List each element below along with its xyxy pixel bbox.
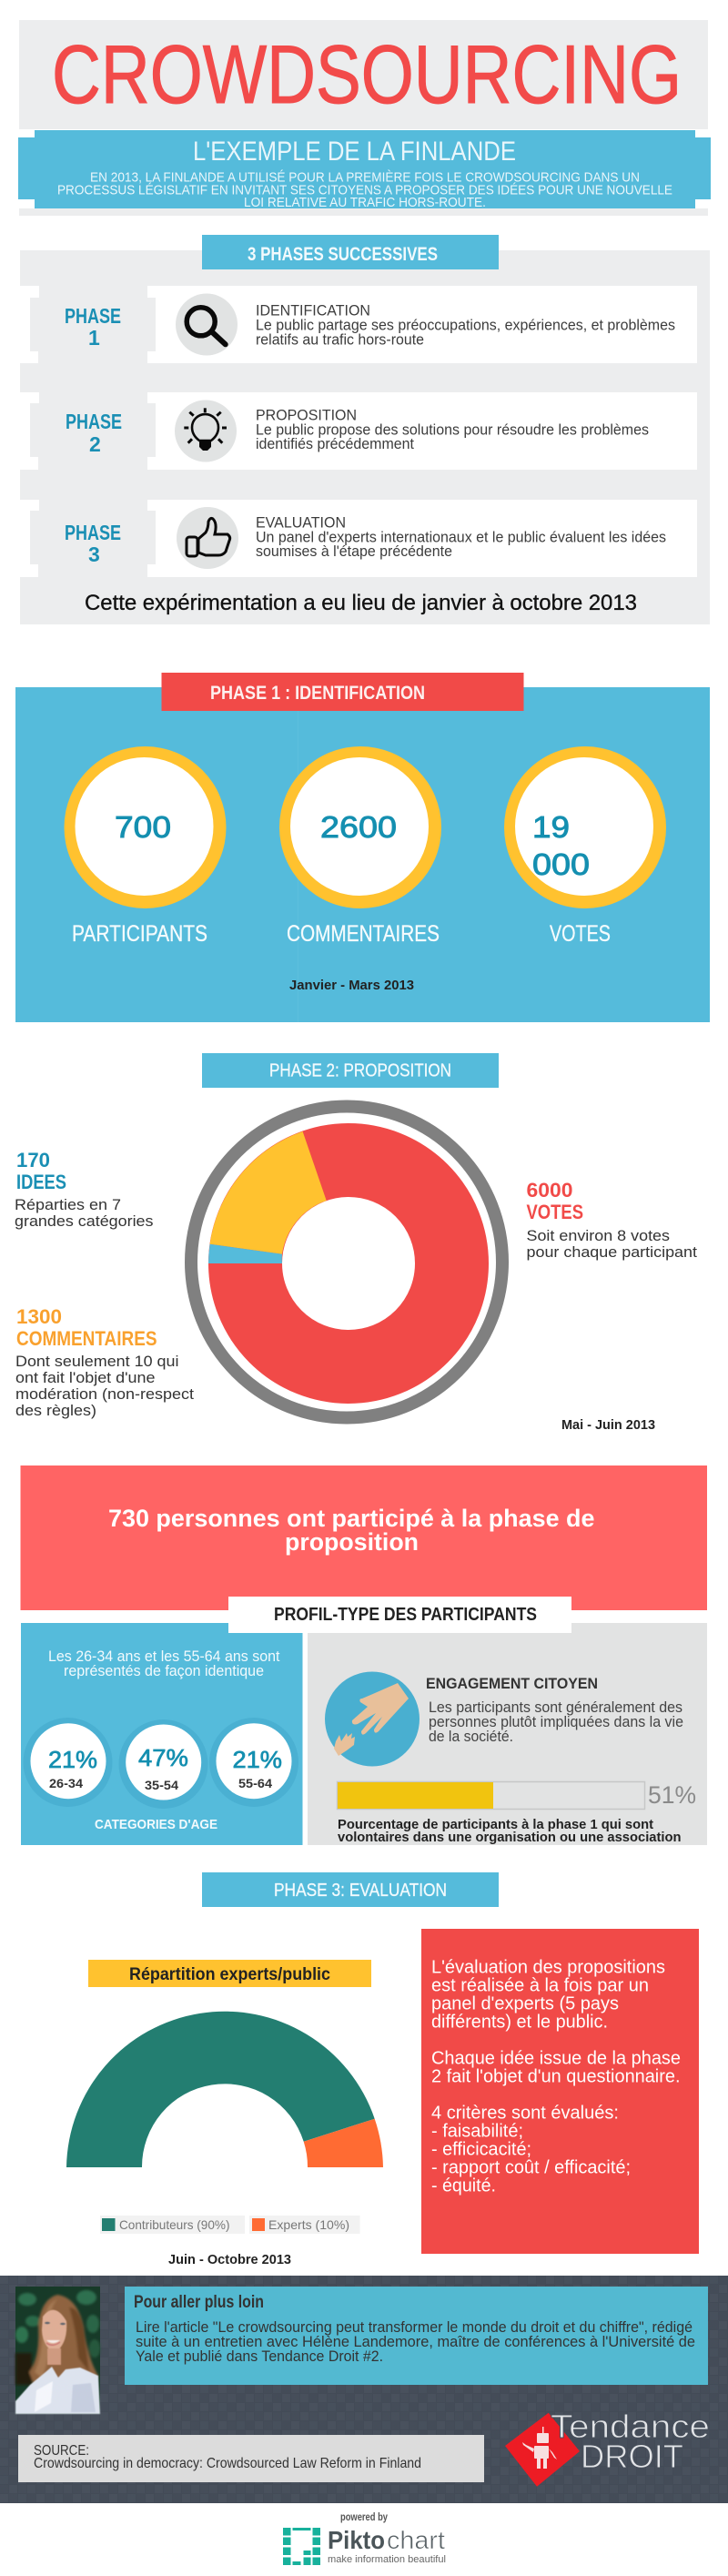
age intro text: Les 26-34 ans et les 55-64 ans sont	[48, 1648, 280, 1665]
phase 1 text: IDENTIFICATION	[256, 302, 370, 319]
callout: 170 idees: Réparties en 7	[15, 1196, 121, 1213]
phase 1 label: PHASE	[65, 304, 121, 328]
phase 2 text: identifiés précédemment	[256, 435, 414, 452]
icon: magnifier	[176, 293, 238, 355]
stat: 21% 55-64: 21%	[233, 1746, 282, 1773]
engagement text: personnes plutôt impliquées dans la vie	[429, 1713, 683, 1730]
heading tab: phase 2: PHASE 2: PROPOSITION	[269, 1061, 451, 1081]
icon: Piktochart logo mark	[283, 2528, 320, 2565]
age caption: CATEGORIES D'AGE	[95, 1817, 217, 1832]
engagement text: de la société.	[429, 1728, 513, 1745]
stat: 2600 commentaires: COMMENTAIRES	[287, 921, 440, 947]
stat: 700 participants: 700	[115, 810, 171, 844]
powered by Piktochart: chart	[387, 2526, 445, 2554]
stat: 700 participants: PARTICIPANTS	[72, 921, 207, 947]
stat: 21% 26-34: 26-34	[49, 1776, 83, 1790]
phase 2 label: 2	[89, 432, 101, 456]
engagement heading: ENGAGEMENT CITOYEN	[426, 1675, 598, 1692]
panel: 730 personnes	[20, 1465, 707, 1610]
callout: 170 idees	[15, 1149, 153, 1230]
panel: evaluation text: - efficicacité;	[431, 2139, 531, 2159]
chart label: Répartition experts/public	[129, 1965, 330, 1984]
ribbon description: EN 2013, LA FINLANDE A UTILISÉ POUR LA PREMIÈRE FOIS LE CROWDSOURCING DANS UN	[90, 169, 640, 186]
powered by Piktochart: make information beautiful	[328, 2554, 446, 2565]
callout: 170 idees: 170	[16, 1149, 50, 1171]
heading tab: phase 3	[202, 1872, 499, 1907]
phase 3 text: EVALUATION	[256, 513, 346, 532]
powered by Piktochart	[283, 2512, 446, 2565]
panel: categories d'age	[21, 1623, 302, 1845]
header panel	[18, 20, 711, 216]
stat: 19 000 votes: 19	[532, 810, 570, 844]
phase 1 label: 1	[88, 326, 100, 350]
stat: 21% 55-64	[209, 1718, 298, 1807]
phase 3 label: 3	[88, 543, 100, 566]
callout: 6000 votes: VOTES	[526, 1201, 583, 1223]
heading tab: profil-type: PROFIL-TYPE DES PARTICIPANTS	[274, 1605, 537, 1625]
phase 2 row	[20, 392, 697, 470]
phase 2 text: Le public propose des solutions pour résoudre les problèmes	[256, 421, 649, 439]
phase 3 row	[20, 500, 697, 577]
callout: 6000 votes	[526, 1179, 697, 1261]
ribbon: l'exemple de la Finlande	[18, 129, 711, 210]
stat: 19 000 votes: VOTES	[550, 921, 611, 947]
heading tab: phase 1	[162, 673, 524, 711]
progress bar 51%	[337, 1781, 696, 1810]
panel: pour aller plus loin: Lire l'article "Le crowdsourcing peut transformer le monde du droit et du chiffre", rédigé	[136, 2318, 693, 2336]
phase 3 text	[256, 513, 666, 560]
chart legend	[100, 2216, 360, 2234]
stat: 2600 commentaires: 2600	[320, 810, 397, 844]
footer band	[0, 2276, 728, 2503]
panel: evaluation text: 4 critères sont évalués:	[431, 2103, 619, 2123]
phase 1 text: relatifs au trafic hors-route	[256, 331, 424, 348]
panel: pour aller plus loin: Pour aller plus loin	[134, 2293, 264, 2312]
phase 1 row	[20, 286, 697, 363]
stat: 47% 35-54: 47%	[138, 1744, 188, 1771]
date: juin octobre: Juin - Octobre 2013	[168, 2253, 291, 2267]
callout: 1300 commentaires: des règles)	[15, 1402, 96, 1419]
powered by Piktochart: powered by	[340, 2512, 388, 2523]
progress caption: Pourcentage de participants à la phase 1 qui sont	[338, 1817, 653, 1832]
section: phase 3 evaluation	[66, 1872, 699, 2267]
date: janvier mars: Janvier - Mars 2013	[289, 979, 414, 993]
phase 3 text: Un panel d'experts internationaux et le public évaluent les idées	[256, 528, 666, 546]
stat: 19 000 votes: 000	[532, 847, 590, 881]
callout: 1300 commentaires: ont fait l'objet d'une	[15, 1369, 155, 1386]
stat: 2600 commentaires	[279, 746, 441, 947]
panel: source	[18, 2435, 484, 2482]
panel: evaluation text	[421, 1929, 699, 2254]
panel: evaluation text: Chaque idée issue de la phase	[431, 2048, 681, 2068]
age intro text	[48, 1648, 280, 1679]
callout: 6000 votes: pour chaque participant	[526, 1243, 697, 1261]
timeline sentence: Cette expérimentation a eu lieu de janvier à octobre 2013	[85, 591, 637, 615]
panel: pour aller plus loin	[125, 2287, 708, 2385]
callout: 6000 votes: 6000	[526, 1179, 573, 1202]
donut chart	[191, 1107, 502, 1418]
phase 1 text	[256, 302, 675, 348]
panel: evaluation text: - équité.	[431, 2175, 496, 2196]
panel: evaluation text: - faisabilité;	[431, 2121, 523, 2141]
ribbon description: PROCESSUS LÉGISLATIF EN INVITANT SES CITOYENS A PROPOSER DES IDÉES POUR UNE NOUVELLE	[57, 182, 672, 198]
progress bar 51%: 51%	[648, 1781, 696, 1809]
callout: 170 idees: grandes catégories	[15, 1212, 153, 1230]
phase 3 label	[65, 521, 121, 566]
section: phase 2 proposition	[15, 1053, 697, 1433]
panel: pour aller plus loin: suite à un entretien avec Hélène Landemore, maître de conférences à l'Université de	[136, 2333, 695, 2350]
chart label	[88, 1960, 371, 1987]
panel: pour aller plus loin: Yale et publié dans Tendance Droit #2.	[136, 2348, 383, 2365]
icon: hands	[325, 1671, 420, 1766]
phase 2 label: PHASE	[66, 410, 122, 433]
stat: 19 000 votes	[504, 746, 666, 947]
panel: source: SOURCE:	[34, 2443, 89, 2459]
progress caption: volontaires dans une organisation ou une association	[338, 1830, 681, 1845]
panel: evaluation text: - rapport coût / efficacité;	[431, 2157, 631, 2177]
logo: Tendance Droit: DROIT	[581, 2438, 683, 2475]
powered by Piktochart: Pikto	[328, 2526, 385, 2554]
stat: 47% 35-54	[118, 1719, 207, 1809]
half donut chart	[66, 2012, 383, 2167]
stat: 21% 26-34	[24, 1718, 113, 1807]
ribbon heading: L'EXEMPLE DE LA FINLANDE	[193, 137, 516, 167]
panel: phase 1 identification	[15, 673, 710, 1022]
progress caption	[338, 1817, 681, 1845]
heading tab: phase 3: PHASE 3: EVALUATION	[274, 1881, 447, 1901]
logo: Tendance Droit: Tendance	[551, 2408, 710, 2445]
phase 3 text: soumises à l'étape précédente	[256, 543, 452, 560]
chart legend: Experts (10%)	[268, 2217, 349, 2232]
phase 1 label	[65, 304, 121, 350]
icon: light bulb	[175, 401, 237, 462]
panel: 730 personnes: 730 personnes ont participé à la phase de	[108, 1505, 595, 1532]
panel: evaluation text: L'évaluation des propositions	[431, 1957, 665, 1977]
panel: profil-type des participants	[21, 1597, 707, 1845]
phase 2 label	[66, 410, 122, 456]
callout: 170 idees: IDEES	[16, 1171, 66, 1193]
ribbon description: LOI RELATIVE AU TRAFIC HORS-ROUTE.	[244, 195, 486, 210]
photo: portrait	[15, 2287, 100, 2414]
heading tab: 3 phases: 3 PHASES SUCCESSIVES	[248, 244, 438, 265]
panel: 730 personnes: proposition	[285, 1528, 419, 1556]
engagement text	[429, 1699, 683, 1745]
heading tab: profil-type	[228, 1597, 571, 1633]
callout: 1300 commentaires: Dont seulement 10 qui	[15, 1353, 178, 1370]
logo: Tendance Droit	[505, 2408, 710, 2487]
heading tab: phase 1: PHASE 1 : IDENTIFICATION	[210, 683, 425, 704]
stat: 21% 26-34: 21%	[48, 1746, 97, 1773]
panel: engagement citoyen	[308, 1623, 707, 1845]
callout: 6000 votes: Soit environ 8 votes	[526, 1227, 670, 1244]
panel: source: Crowdsourcing in democracy: Crowdsourced Law Reform in Finland	[34, 2456, 421, 2471]
engagement text: Les participants sont généralement des	[429, 1699, 682, 1716]
panel: evaluation text: 2 fait l'objet d'un questionnaire.	[431, 2066, 681, 2086]
date: mai juin: Mai - Juin 2013	[561, 1418, 655, 1433]
heading tab: phase 2	[202, 1053, 499, 1088]
stat: 47% 35-54: 35-54	[145, 1778, 178, 1792]
panel: evaluation text: est réalisée à la fois par un	[431, 1975, 649, 1995]
heading tab: 3 phases	[202, 235, 499, 269]
panel: 3 phases successives	[20, 235, 710, 624]
callout: 1300 commentaires: modération (non-respect	[15, 1385, 194, 1403]
phase 2 text: PROPOSITION	[256, 406, 357, 424]
phase 1 text: Le public partage ses préoccupations, expériences, et problèmes	[256, 317, 675, 333]
phase 2 text	[256, 406, 649, 452]
stat: 700 participants	[64, 746, 226, 947]
icon: thumb up	[177, 507, 238, 569]
age intro text: représentés de façon identique	[64, 1662, 264, 1679]
ribbon description	[57, 169, 672, 210]
panel: evaluation text: différents) et le public.	[431, 2012, 608, 2032]
panel: evaluation text: panel d'experts (5 pays	[431, 1993, 619, 2013]
chart legend: Contributeurs (90%)	[119, 2217, 229, 2232]
callout: 1300 commentaires: 1300	[16, 1305, 62, 1328]
stat: 21% 55-64: 55-64	[238, 1776, 272, 1790]
callout: 1300 commentaires: COMMENTAIRES	[16, 1327, 157, 1350]
phase 3 label: PHASE	[65, 521, 121, 544]
callout: 1300 commentaires	[15, 1305, 194, 1419]
